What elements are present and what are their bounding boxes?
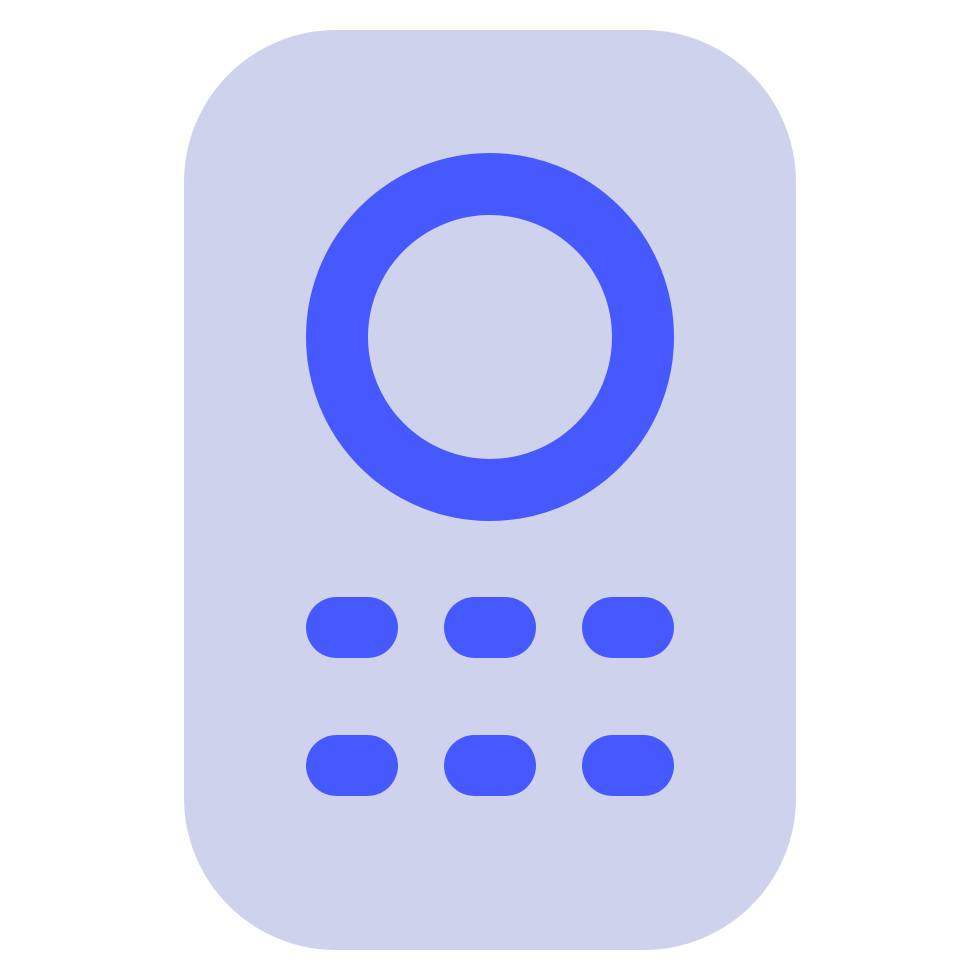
button row 2 xyxy=(306,735,674,796)
button row 1 xyxy=(306,597,674,658)
remote body xyxy=(184,30,796,950)
ring button xyxy=(337,184,643,490)
